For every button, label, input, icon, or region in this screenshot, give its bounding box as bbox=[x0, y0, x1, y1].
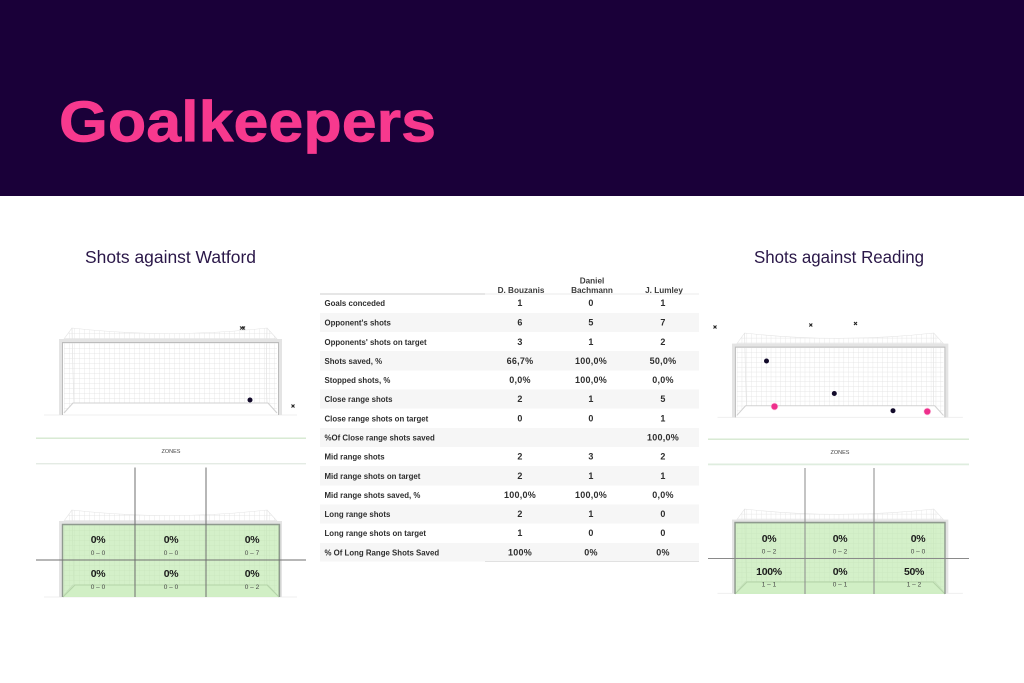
column: Daniel Bachmann: 1 bbox=[588, 394, 594, 404]
table header bbox=[498, 276, 683, 295]
zone values: 0 – 2 bbox=[833, 548, 848, 556]
column: J. Lumley: 0 bbox=[660, 509, 666, 519]
title: Goalkeepers bbox=[59, 90, 436, 154]
row labels: Stopped shots, % bbox=[324, 376, 390, 385]
table stripes bbox=[320, 313, 699, 562]
shot markers: saved bbox=[764, 358, 896, 413]
column: J. Lumley bbox=[647, 298, 679, 558]
row labels: Mid range shots saved, % bbox=[324, 491, 420, 500]
column: J. Lumley: 0,0% bbox=[652, 375, 674, 385]
row labels: Long range shots bbox=[324, 510, 391, 519]
zone values: 0% bbox=[164, 568, 179, 580]
green zones bbox=[735, 522, 945, 594]
column: J. Lumley: 100,0% bbox=[647, 432, 679, 442]
column: Daniel Bachmann bbox=[575, 298, 607, 558]
zone values: 50% bbox=[904, 566, 925, 578]
zone values: 0% bbox=[833, 566, 848, 578]
column: Daniel Bachmann: 100,0% bbox=[575, 375, 607, 385]
zone values: 0 – 1 bbox=[833, 582, 848, 588]
column: J. Lumley: 50,0% bbox=[650, 356, 676, 366]
table header: D. Bouzanis bbox=[498, 286, 545, 295]
column: D. Bouzanis: 2 bbox=[517, 509, 523, 519]
goal illustration: Watford zones bbox=[44, 510, 297, 597]
column: Daniel Bachmann: 0 bbox=[588, 528, 594, 538]
row labels: Close range shots bbox=[324, 395, 393, 404]
zone values: 0 – 2 bbox=[245, 584, 260, 591]
column: Daniel Bachmann: 0 bbox=[588, 298, 594, 308]
zone values: 0% bbox=[91, 534, 106, 546]
column: J. Lumley: 0% bbox=[656, 548, 670, 558]
column: D. Bouzanis: 1 bbox=[517, 298, 523, 308]
column: D. Bouzanis: 3 bbox=[517, 337, 523, 347]
column: Daniel Bachmann: 0% bbox=[584, 548, 598, 558]
column: D. Bouzanis: 66,7% bbox=[507, 356, 533, 366]
zone values: 100% bbox=[756, 566, 783, 578]
column: Daniel Bachmann: 0 bbox=[588, 414, 594, 424]
zone values: 0 – 7 bbox=[245, 550, 260, 557]
column: Daniel Bachmann: 1 bbox=[588, 471, 594, 481]
column: D. Bouzanis: 2 bbox=[517, 452, 523, 462]
shot markers: misses bbox=[240, 326, 294, 408]
zone values: 0% bbox=[164, 534, 179, 546]
panel: Reading zones goal bbox=[708, 468, 969, 594]
row labels: Shots saved, % bbox=[324, 357, 382, 366]
panel: Reading shot map bbox=[714, 322, 963, 417]
panel: Watford zones goal bbox=[36, 468, 306, 597]
zone values: 0 – 0 bbox=[164, 584, 179, 591]
column: Daniel Bachmann: 5 bbox=[588, 318, 594, 328]
row labels: Long range shots on target bbox=[324, 529, 426, 538]
column: J. Lumley: 7 bbox=[660, 318, 666, 328]
column: J. Lumley: 1 bbox=[660, 298, 666, 308]
zone values: 1 – 2 bbox=[907, 582, 922, 588]
row labels: % Of Long Range Shots Saved bbox=[324, 548, 439, 558]
zone values bbox=[756, 533, 926, 588]
row labels: Mid range shots on target bbox=[324, 472, 421, 481]
row labels: Goals conceded bbox=[324, 299, 385, 308]
row labels: Close range shots on target bbox=[324, 414, 429, 424]
column: J. Lumley: 2 bbox=[660, 337, 666, 347]
column: D. Bouzanis: 2 bbox=[517, 394, 523, 404]
column: J. Lumley: 0 bbox=[660, 528, 666, 538]
row labels bbox=[324, 299, 439, 558]
column: Daniel Bachmann: 1 bbox=[588, 337, 594, 347]
table header: Bachmann bbox=[571, 286, 613, 295]
zone values: 0% bbox=[245, 534, 260, 546]
shot markers: misses bbox=[714, 322, 857, 328]
zone grid lines bbox=[708, 468, 969, 594]
column: J. Lumley: 0,0% bbox=[652, 490, 674, 500]
column: Daniel Bachmann: 1 bbox=[588, 509, 594, 519]
zone grid lines bbox=[36, 468, 306, 597]
zone values: 0 – 0 bbox=[91, 584, 106, 591]
column: D. Bouzanis: 100% bbox=[508, 548, 532, 558]
shot marker: goal ball bbox=[248, 398, 252, 402]
zone values: 0% bbox=[245, 568, 260, 580]
column: Daniel Bachmann: 100,0% bbox=[575, 356, 607, 366]
shot markers: goals bbox=[771, 403, 931, 415]
column: D. Bouzanis: 0,0% bbox=[509, 375, 531, 385]
zone values: 0% bbox=[91, 568, 106, 580]
zone values: 0 – 2 bbox=[762, 548, 777, 556]
panel: comparison table bbox=[320, 276, 699, 562]
column: D. Bouzanis: 100,0% bbox=[504, 490, 536, 500]
table header: J. Lumley bbox=[645, 286, 683, 295]
label: zones: ZONES bbox=[831, 450, 850, 456]
column: D. Bouzanis: 1 bbox=[517, 528, 523, 538]
column: D. Bouzanis bbox=[504, 298, 536, 558]
column: J. Lumley: 2 bbox=[660, 452, 666, 462]
label: zones: ZONES bbox=[162, 449, 181, 455]
column: Daniel Bachmann: 100,0% bbox=[575, 490, 607, 500]
header banner bbox=[0, 0, 1024, 196]
row labels: Opponents' shots on target bbox=[324, 338, 427, 347]
column: J. Lumley: 5 bbox=[660, 394, 666, 404]
column: D. Bouzanis: 2 bbox=[517, 471, 523, 481]
goal illustration: Reading zones bbox=[717, 509, 963, 593]
column: Daniel Bachmann: 3 bbox=[588, 452, 594, 462]
heading: shots against Reading: Shots against Reading bbox=[754, 247, 924, 267]
panel: Watford shot map bbox=[44, 326, 297, 415]
goal illustration: Reading shots bbox=[717, 333, 963, 417]
green zones bbox=[63, 524, 279, 597]
column: J. Lumley: 1 bbox=[660, 471, 666, 481]
row labels: Mid range shots bbox=[324, 452, 385, 462]
zone values: 1 – 1 bbox=[762, 582, 777, 588]
column: J. Lumley: 1 bbox=[660, 414, 666, 424]
zone values: 0 – 0 bbox=[911, 548, 926, 556]
row labels: %Of Close range shots saved bbox=[324, 434, 435, 442]
column: D. Bouzanis: 6 bbox=[517, 318, 523, 328]
row labels: Opponent's shots bbox=[324, 318, 391, 328]
zone values: 0% bbox=[911, 533, 926, 545]
column: D. Bouzanis: 0 bbox=[517, 414, 523, 424]
zone values: 0 – 0 bbox=[164, 550, 179, 557]
heading: shots against Watford: Shots against Watford bbox=[85, 247, 256, 267]
table header: Daniel bbox=[580, 276, 604, 286]
zone values: 0% bbox=[762, 533, 777, 545]
zone values bbox=[91, 534, 260, 591]
goal illustration: Watford shots bbox=[44, 328, 297, 415]
zone values: 0 – 0 bbox=[91, 550, 106, 557]
zone values: 0% bbox=[833, 533, 848, 545]
